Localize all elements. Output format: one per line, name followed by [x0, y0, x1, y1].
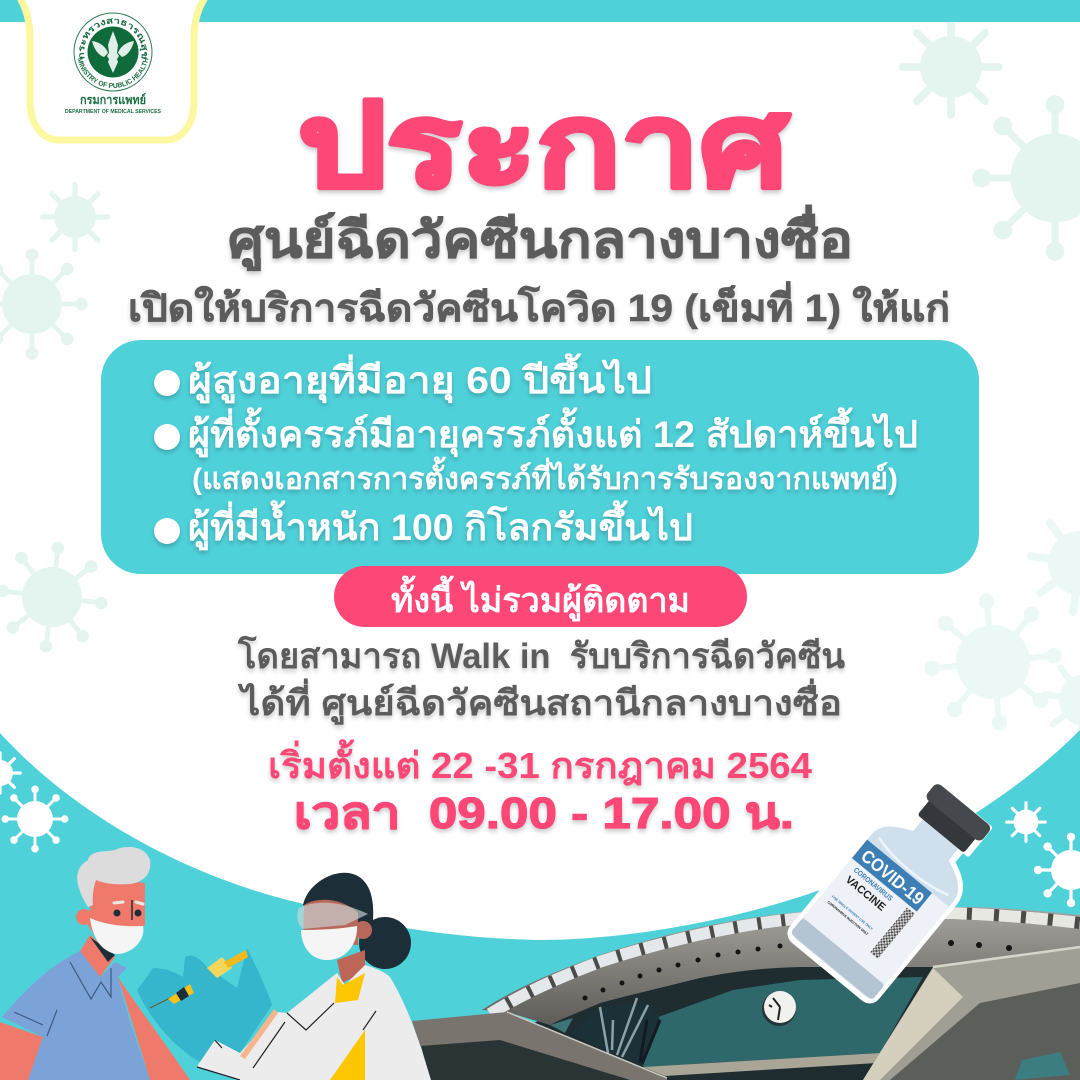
ministry of public health seal: [74, 12, 152, 92]
roof arc: [482, 907, 1080, 1025]
bullet: pregnant: ผู้ที่ตั้งครรภ์มีอายุครรภ์ตั้งแต่ 12 สัปดาห์ขึ้นไป: [188, 407, 918, 458]
vaccine vial: CORONAVIRUS INJECTION ONLY: [826, 900, 870, 937]
coat collar lines: [197, 1003, 376, 1080]
vaccine vial: [786, 770, 1007, 1005]
patient neck: [80, 935, 115, 977]
bullet: elderly: [154, 353, 652, 404]
roof rivets: [582, 940, 1012, 1000]
roof ribs: [490, 913, 1080, 1014]
patient collar lines: [14, 962, 111, 1036]
patient arm left: [0, 1022, 43, 1080]
clock: [762, 991, 796, 1026]
time: เวลา 09.00 - 17.00 น.: [294, 789, 794, 838]
bottom teal wave: [0, 730, 1080, 1080]
white virus icons on wave: [0, 753, 1080, 907]
patient ear: [76, 909, 92, 925]
label text: coronavirus: CORONAVIRUS: [852, 865, 895, 903]
top teal band: [0, 0, 1080, 22]
lower teal window: [1015, 1052, 1070, 1080]
nurse face: [303, 900, 358, 945]
note: pregnancy document: (แสดงเอกสารการตั้งครรภ์ที่ได้รับการรับรองจากแพทย์): [192, 456, 898, 496]
title: ประกาศ: [298, 80, 790, 211]
nurse head hair: [303, 873, 373, 930]
pink pill: exclusion note: [334, 566, 747, 627]
lower left beam: [412, 1012, 667, 1080]
nurse glove hand: [137, 948, 272, 1062]
vial white outline: [786, 771, 1006, 1005]
panel: eligible groups: [101, 340, 979, 574]
illustration: nurse: [137, 873, 431, 1080]
subheading: เปิดให้บริการฉีดวัคซีนโควิด 19 (เข็มที่ 1) ให้แก่: [128, 281, 950, 330]
patient hair: [77, 847, 150, 907]
ledge: [643, 1053, 880, 1076]
logo badge: DEPARTMENT OF MEDICAL SERVICES: [65, 109, 161, 115]
patient arm right: [118, 977, 190, 1080]
patient mask: [90, 918, 143, 954]
location text: ได้ที่ ศูนย์ฉีดวัคซีนสถานีกลางบางซื่อ: [237, 678, 842, 725]
vial glass body: [790, 797, 984, 1001]
illustration: elderly patient: [0, 847, 190, 1080]
gable roof right: [863, 947, 1080, 1080]
nurse neck: [337, 950, 365, 983]
label bottom glass: [790, 918, 885, 1000]
building dark base: [500, 950, 1080, 1080]
nurse bun: [359, 917, 411, 969]
gable light panel: [863, 968, 963, 1080]
background virus decorations: [0, 19, 1080, 659]
vaccine vial: COVID-19: [857, 846, 928, 909]
glass facade: [643, 977, 923, 1067]
label small text: FOR SINGLE PATIENT USE ONLY: [831, 895, 874, 931]
patient eyes: [114, 910, 120, 916]
date: เริ่มตั้งแต่ 22 -31 กรกฎาคม 2564: [268, 739, 812, 786]
patient face: [88, 878, 145, 945]
label barcode: [870, 908, 915, 959]
ministry of public health seal: กระทรวงสาธารณสุข: [79, 18, 148, 59]
logo badge: [17, 0, 208, 144]
nurse coat: [197, 965, 431, 1080]
nurse mask: [301, 926, 357, 960]
label band: [852, 840, 932, 912]
vial label: [803, 840, 949, 985]
struts: [570, 1003, 660, 1063]
ministry of public health seal: MINISTRY OF PUBLIC HEALTH: [78, 58, 148, 88]
walk-in text: โดยสามารถ Walk in รับบริการฉีดวัคซีน: [237, 635, 845, 676]
bullet: weight: ผู้ที่มีน้ำหนัก 100 กิโลกรัมขึ้นไป: [188, 500, 693, 551]
bang sue grand station building: [412, 907, 1080, 1080]
bullet: elderly: ผู้สูงอายุที่มีอายุ 60 ปีขึ้นไป: [188, 353, 652, 404]
nurse yellow shirt: [330, 973, 365, 1080]
department name: กรมการแพทย์: [80, 93, 146, 107]
illustration: syringe: [150, 950, 248, 1008]
glass highlight: [875, 838, 949, 900]
heading: vaccination centre: ศูนย์ฉีดวัคซีนกลางบางซื่อ: [228, 205, 853, 271]
label text: vaccine: VACCINE: [843, 874, 888, 914]
nurse cuff: [240, 1009, 278, 1059]
patient shirt: [2, 951, 150, 1080]
vial cap: [913, 782, 992, 857]
left window: [550, 1018, 573, 1033]
lower left structure: [420, 1037, 627, 1080]
pink pill: exclusion note: ทั้งนี้ ไม่รวมผู้ติดตาม: [391, 575, 690, 622]
nurse goggles: [297, 903, 368, 929]
